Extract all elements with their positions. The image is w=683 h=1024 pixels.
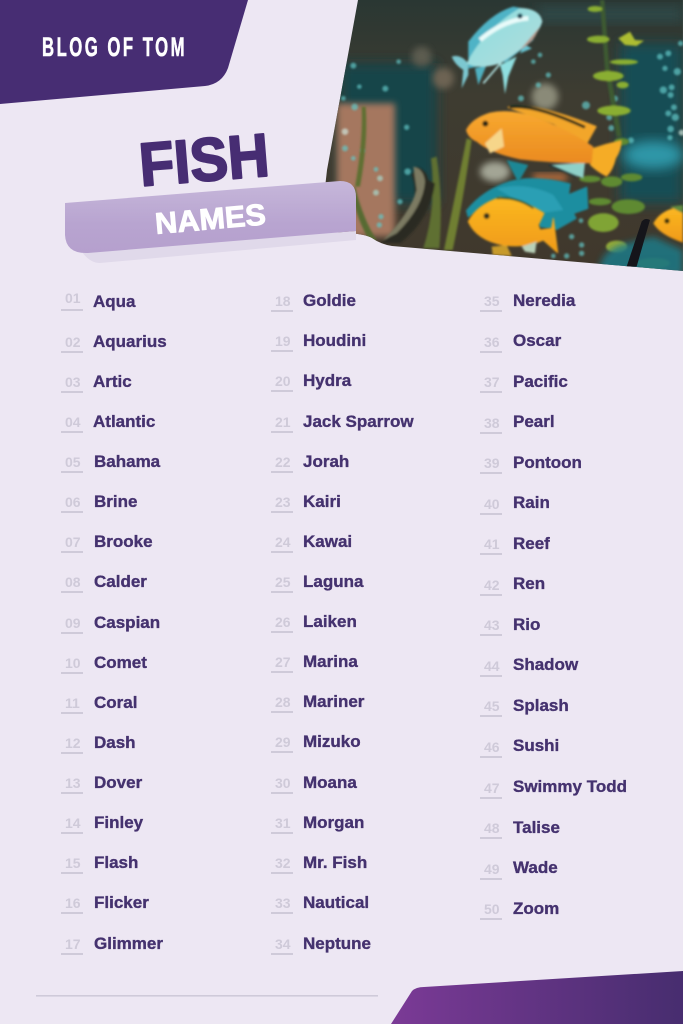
- title: FISH: FISH: [137, 121, 272, 199]
- title: [65, 121, 356, 263]
- row 22: 22: [275, 454, 291, 470]
- row 44: 44: [484, 658, 500, 674]
- row 04: 04: [65, 414, 81, 430]
- row 11: [61, 693, 137, 714]
- row 02: [61, 332, 167, 353]
- row 37: 37: [484, 374, 500, 390]
- row 07: 07: [65, 534, 81, 550]
- row 10: 10: [65, 655, 81, 671]
- row 30: 30: [275, 775, 291, 791]
- row 48: Talise: [513, 818, 560, 837]
- row 01: [61, 290, 136, 311]
- row 13: Dover: [94, 773, 143, 792]
- row 36: Oscar: [513, 331, 562, 350]
- row 45: [480, 696, 569, 717]
- row 44: Shadow: [513, 655, 579, 674]
- row 02: 02: [65, 334, 81, 350]
- row 35: [480, 291, 576, 312]
- orange fish: [466, 106, 622, 183]
- row 39: [480, 453, 582, 474]
- row 06: Brine: [94, 492, 137, 511]
- row 16: Flicker: [94, 893, 149, 912]
- row 25: 25: [275, 574, 291, 590]
- yellow fish: [468, 197, 558, 256]
- row 29: 29: [275, 734, 291, 750]
- row 31: [271, 813, 364, 834]
- row 36: 36: [484, 334, 500, 350]
- row 45: 45: [484, 698, 500, 714]
- ribbon: [65, 181, 356, 253]
- row 40: [480, 493, 550, 515]
- row 24: [271, 532, 352, 553]
- row 46: Sushi: [513, 736, 559, 755]
- row 26: [271, 612, 357, 633]
- row 21: [271, 412, 414, 433]
- row 47: 47: [484, 780, 500, 796]
- row 02: Aquarius: [93, 332, 167, 351]
- row 48: 48: [484, 820, 500, 836]
- row 48: [480, 818, 560, 839]
- row 12: 12: [65, 735, 81, 751]
- row 11: 11: [65, 695, 80, 711]
- row 22: [271, 452, 349, 473]
- row 25: [271, 572, 364, 593]
- row 35: Neredia: [513, 291, 576, 310]
- row 04: Atlantic: [93, 412, 155, 431]
- row 43: Rio: [513, 615, 540, 634]
- row 22: Jorah: [303, 452, 349, 471]
- blue fish (top): [452, 7, 542, 94]
- row 12: Dash: [94, 733, 136, 752]
- row 07: [61, 532, 153, 553]
- row 16: 16: [65, 895, 81, 911]
- row 05: [61, 452, 161, 473]
- row 17: [61, 934, 163, 955]
- row 29: [271, 732, 361, 753]
- row 38: Pearl: [513, 412, 555, 431]
- footer tab: [391, 971, 683, 1024]
- header tab: [0, 0, 248, 104]
- row 32: 32: [275, 855, 291, 871]
- row 20: 20: [275, 373, 291, 389]
- row 13: [61, 773, 143, 794]
- row 34: Neptune: [303, 934, 371, 953]
- row 07: Brooke: [94, 532, 153, 551]
- row 39: Pontoon: [513, 453, 582, 472]
- row 09: [61, 613, 160, 634]
- row 47: Swimmy Todd: [513, 777, 627, 796]
- row 10: [61, 653, 147, 674]
- row 40: Rain: [513, 493, 550, 512]
- row 32: Mr. Fish: [303, 853, 367, 872]
- row 44: [480, 655, 579, 677]
- row 08: Calder: [94, 572, 147, 591]
- row 08: 08: [65, 574, 81, 590]
- row 37: [480, 372, 568, 393]
- row 11: Coral: [94, 693, 137, 712]
- row 25: Laguna: [303, 572, 364, 591]
- row 43: [480, 615, 540, 636]
- row 45: Splash: [513, 696, 569, 715]
- row 37: Pacific: [513, 372, 568, 391]
- row 09: 09: [65, 615, 81, 631]
- row 04: [61, 412, 155, 433]
- row 06: [61, 492, 137, 513]
- row 42: 42: [484, 577, 500, 593]
- row 17: Glimmer: [94, 934, 163, 953]
- row 41: 41: [484, 536, 500, 552]
- row 09: Caspian: [94, 613, 160, 632]
- row 14: Finley: [94, 813, 144, 832]
- row 03: 03: [65, 374, 81, 390]
- row 23: [271, 492, 341, 513]
- row 01: Aqua: [93, 292, 136, 311]
- column 1 names: [61, 290, 167, 955]
- row 33: [271, 893, 369, 914]
- row 15: 15: [65, 855, 81, 871]
- row 26: Laiken: [303, 612, 357, 631]
- row 19: Houdini: [303, 331, 366, 350]
- row 49: 49: [484, 861, 500, 877]
- row 21: Jack Sparrow: [303, 412, 414, 431]
- row 16: [61, 893, 149, 914]
- row 49: Wade: [513, 858, 558, 877]
- row 50: Zoom: [513, 899, 559, 918]
- row 14: 14: [65, 815, 81, 831]
- row 42: Ren: [513, 574, 545, 593]
- blue fish (behind): [467, 179, 588, 229]
- row 27: 27: [275, 654, 291, 670]
- row 41: Reef: [513, 534, 550, 553]
- row 47: [480, 777, 627, 799]
- row 32: [271, 853, 367, 874]
- row 40: 40: [484, 496, 500, 512]
- title: NAMES: NAMES: [154, 198, 267, 241]
- photo: aquarium fish: [320, 0, 683, 275]
- row 29: Mizuko: [303, 732, 361, 751]
- row 14: [61, 813, 144, 834]
- row 50: [480, 899, 559, 920]
- row 30: Moana: [303, 773, 357, 792]
- row 13: 13: [65, 775, 81, 791]
- row 49: [480, 858, 558, 880]
- row 20: Hydra: [303, 371, 352, 390]
- row 01: 01: [65, 290, 81, 306]
- row 28: Mariner: [303, 692, 365, 711]
- row 05: Bahama: [94, 452, 161, 471]
- row 28: 28: [275, 694, 291, 710]
- row 03: Artic: [93, 372, 132, 391]
- row 24: Kawai: [303, 532, 352, 551]
- row 31: 31: [275, 815, 291, 831]
- row 36: [480, 331, 562, 353]
- row 23: 23: [275, 494, 291, 510]
- row 46: [480, 736, 559, 758]
- row 21: 21: [275, 414, 291, 430]
- row 19: [271, 331, 366, 352]
- row 17: 17: [65, 936, 81, 952]
- row 34: [271, 934, 371, 955]
- row 31: Morgan: [303, 813, 364, 832]
- row 28: [271, 692, 365, 713]
- row 18: Goldie: [303, 291, 356, 310]
- row 18: [271, 291, 356, 312]
- row 23: Kairi: [303, 492, 341, 511]
- row 41: [480, 534, 550, 555]
- row 33: Nautical: [303, 893, 369, 912]
- row 10: Comet: [94, 653, 147, 672]
- row 15: [61, 853, 138, 874]
- row 46: 46: [484, 739, 500, 755]
- row 39: 39: [484, 455, 500, 471]
- row 03: [61, 372, 132, 393]
- row 43: 43: [484, 617, 500, 633]
- row 35: 35: [484, 293, 500, 309]
- row 38: 38: [484, 415, 500, 431]
- row 30: [271, 773, 357, 794]
- yellow fish (right edge): [653, 205, 683, 243]
- aquatic plants: [352, 0, 670, 269]
- black tube: [627, 219, 650, 267]
- row 38: [480, 412, 555, 434]
- row 42: [480, 574, 545, 596]
- ribbon shadow: [82, 231, 356, 263]
- row 06: 06: [65, 494, 81, 510]
- column 3 names: [480, 291, 627, 920]
- row 15: Flash: [94, 853, 138, 872]
- row 05: 05: [65, 454, 81, 470]
- row 50: 50: [484, 901, 500, 917]
- row 26: 26: [275, 614, 291, 630]
- row 27: Marina: [303, 652, 358, 671]
- row 19: 19: [275, 333, 291, 349]
- row 24: 24: [275, 534, 291, 550]
- row 33: 33: [275, 895, 291, 911]
- brand logo text: BLOG OF TOM: [42, 32, 187, 62]
- row 27: [271, 652, 358, 673]
- row 18: 18: [275, 293, 291, 309]
- row 12: [61, 733, 136, 754]
- bubbles: [341, 41, 683, 259]
- row 20: [271, 371, 352, 392]
- row 08: [61, 572, 147, 593]
- row 34: 34: [275, 936, 291, 952]
- column 2 names: [271, 291, 414, 955]
